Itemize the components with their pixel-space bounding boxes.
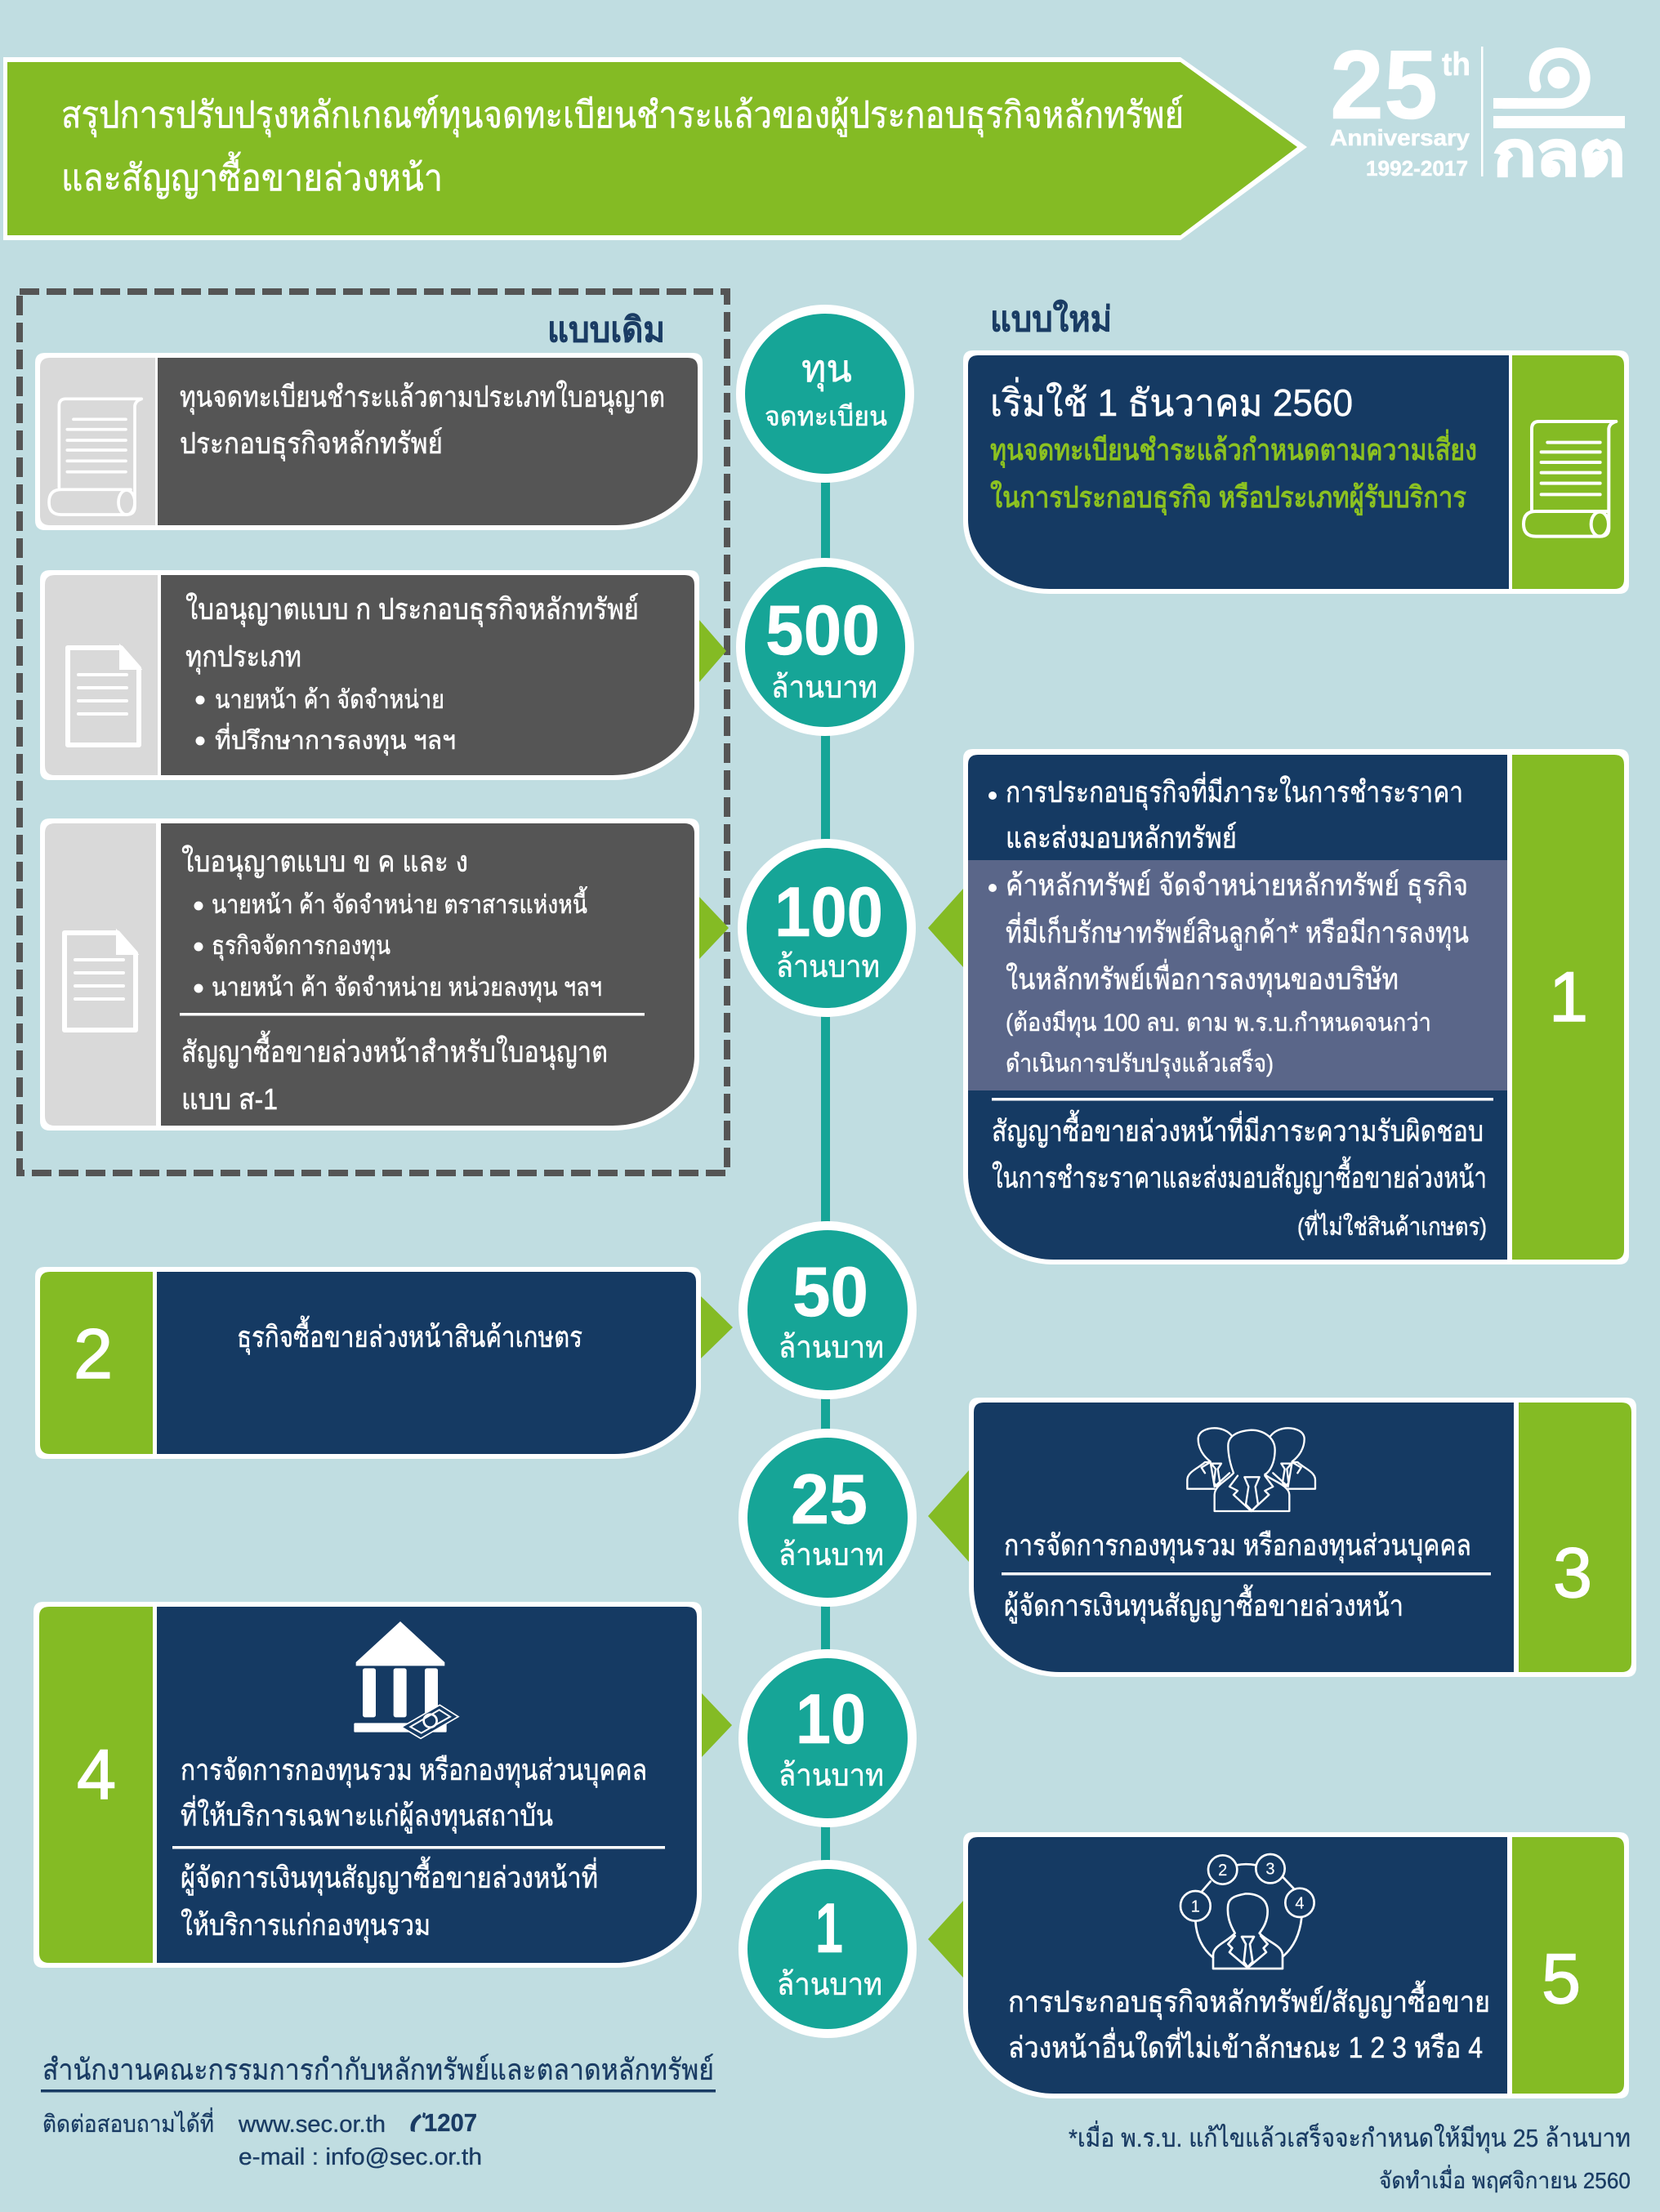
circle: 50 million baht: ล้านบาท — [779, 1331, 884, 1365]
icon: scroll — [49, 399, 141, 515]
arrow: panel 2 to 50 — [701, 1296, 733, 1358]
footnote: จัดทำเมื่อ พฤศจิกายน 2560 — [1379, 2165, 1631, 2193]
licence B C D text: แบบ ส-1 — [181, 1082, 278, 1116]
panel text: ประกอบธุรกิจหลักทรัพย์ — [180, 426, 443, 462]
heading: old scheme: แบบเดิม — [547, 310, 665, 349]
panel 5 text — [1008, 1980, 1490, 2064]
logo: 25th anniversary and SEC: 1992-2017 — [1366, 156, 1468, 181]
panel 1 text — [988, 772, 1493, 1241]
circle: 10 million baht: 10 — [796, 1680, 866, 1759]
number 3: 3 — [1553, 1534, 1592, 1612]
icon: person with numbered circles: 4 — [1295, 1894, 1305, 1912]
panel 5 text: ล่วงหน้าอื่นใดที่ไม่เข้าลักษณะ 1 2 3 หรือ 4 — [1008, 2027, 1483, 2064]
circle: 1 million baht: 1 — [815, 1889, 843, 1968]
panel 3 — [969, 1398, 1636, 1677]
circle: 100 million baht: 100 — [774, 873, 883, 952]
title banner arrow — [3, 57, 1307, 240]
arrow: panel 4 to 10 — [702, 1693, 732, 1757]
timeline vertical line — [821, 408, 830, 1920]
circle: 500 million baht — [736, 558, 914, 736]
panel 1 text: การประกอบธุรกิจที่มีภาระในการชำระราคา — [1006, 772, 1463, 810]
panel 2 text: ธุรกิจซื้อขายล่วงหน้าสินค้าเกษตร — [237, 1315, 582, 1355]
arrow: 100 to panel 1 — [928, 889, 963, 967]
icon: person with numbered circles: 1 — [1191, 1898, 1200, 1915]
panel text — [180, 380, 665, 462]
panel 3 text — [1002, 1528, 1491, 1624]
licence B C D text: ธุรกิจจัดการกองทุน — [212, 931, 390, 961]
circle: 100 million baht — [738, 839, 916, 1017]
panel 1 — [963, 749, 1629, 1264]
panel: licence types B C D — [40, 818, 699, 1131]
arrow: licence B C D to 100 — [699, 897, 729, 959]
panel: new registered capital — [963, 350, 1629, 594]
licence B C D text — [180, 845, 645, 1116]
icon: bank with banknote — [354, 1621, 458, 1738]
footnote — [1069, 2121, 1631, 2193]
new scheme text — [990, 377, 1477, 516]
footer: organisation and contact: ติดต่อสอบถามได้ที่ — [42, 2107, 214, 2138]
panel 1 text: ค้าหลักทรัพย์ จัดจำหน่ายหลักทรัพย์ ธุรกิจ — [1006, 868, 1468, 903]
panel 3 text: ผู้จัดการเงินทุนสัญญาซื้อขายล่วงหน้า — [1004, 1584, 1403, 1624]
icon: person with numbered circles: 2 — [1218, 1862, 1227, 1880]
circle: registered capital: จดทะเบียน — [765, 401, 887, 431]
number 4: 4 — [77, 1736, 116, 1814]
panel 4 text: การจัดการกองทุนรวม หรือกองทุนส่วนบุคคล — [181, 1753, 647, 1788]
icon: person with numbered circles — [1180, 1854, 1314, 1969]
dashed frame: old scheme — [20, 292, 727, 1173]
logo: 25th anniversary and SEC: 25 — [1330, 30, 1438, 140]
panel 1 text: (ต้องมีทุน 100 ลบ. ตาม พ.ร.บ.กำหนดจนกว่า — [1006, 1010, 1431, 1038]
licence B C D text: สัญญาซื้อขายล่วงหน้าสำหรับใบอนุญาต — [181, 1030, 608, 1070]
new scheme text: เริ่มใช้ 1 ธันวาคม 2560 — [990, 377, 1353, 424]
licence B C D text: นายหน้า ค้า จัดจำหน่าย ตราสารแห่งหนี้ — [212, 886, 587, 919]
logo: 25th anniversary and SEC: th — [1442, 47, 1470, 83]
circle: 1 million baht: ล้านบาท — [777, 1968, 882, 2002]
circle: 25 million baht — [739, 1429, 917, 1607]
panel 1 text: (ที่ไม่ใช่สินค้าเกษตร) — [1297, 1210, 1487, 1241]
new scheme text: ทุนจดทะเบียนชำระแล้วกำหนดตามความเสี่ยง — [990, 429, 1477, 469]
circle: 50 million baht: 50 — [792, 1253, 868, 1331]
number 1: 1 — [1549, 958, 1588, 1037]
icon: scroll — [1524, 421, 1616, 537]
licence A text: นายหน้า ค้า จัดจำหน่าย — [215, 685, 444, 714]
circle: registered capital: ทุน — [801, 347, 852, 392]
circle: 25 million baht: ล้านบาท — [779, 1538, 884, 1572]
licence A text — [185, 592, 639, 756]
title text: และสัญญาซื้อขายล่วงหน้า — [61, 151, 443, 198]
panel 4 text — [172, 1753, 665, 1943]
circle: 10 million baht — [739, 1649, 917, 1827]
icon: three people — [1187, 1428, 1315, 1511]
footer: organisation and contact: www.sec.or.th — [238, 2112, 386, 2138]
logo: 25th anniversary and SEC: Anniversary — [1330, 125, 1470, 150]
panel 1 text: สัญญาซื้อขายล่วงหน้าที่มีภาระความรับผิดชอบ — [992, 1109, 1484, 1148]
licence B C D text: ใบอนุญาตแบบ ข ค และ ง — [181, 845, 468, 880]
circle: 1 million baht — [739, 1860, 917, 2038]
icon: document — [68, 648, 139, 745]
footer: organisation and contact: 1207 — [424, 2108, 477, 2137]
panel 5 text: การประกอบธุรกิจหลักทรัพย์/สัญญาซื้อขาย — [1008, 1980, 1490, 2020]
panel 4 text: ให้บริการแก่กองทุนรวม — [181, 1908, 431, 1943]
panel: old registered capital — [35, 353, 703, 530]
title text — [61, 94, 1184, 198]
licence A text: ใบอนุญาตแบบ ก ประกอบธุรกิจหลักทรัพย์ — [185, 592, 639, 627]
circle: 100 million baht: ล้านบาท — [776, 950, 880, 984]
icon: document — [65, 933, 136, 1030]
panel 1 text: ที่มีเก็บรักษาทรัพย์สินลูกค้า* หรือมีการลงทุน — [1006, 912, 1469, 951]
panel 5 — [963, 1832, 1629, 2098]
circle: 10 million baht: ล้านบาท — [779, 1759, 884, 1793]
panel 1 text: ในหลักทรัพย์เพื่อการลงทุนของบริษัท — [1006, 959, 1399, 997]
footer: organisation and contact: e-mail : info@sec.or.th — [239, 2144, 482, 2170]
number 5: 5 — [1542, 1940, 1581, 2018]
licence A text: ทุกประเภท — [185, 640, 301, 675]
circle: registered capital — [736, 305, 914, 483]
logo: 25th anniversary and SEC — [1330, 30, 1625, 188]
panel 4 — [33, 1602, 702, 1968]
circle: 500 million baht: 500 — [765, 591, 880, 670]
arrow: licence A to 500 — [699, 620, 726, 682]
circle: 500 million baht: ล้านบาท — [771, 671, 877, 705]
heading: new scheme: แบบใหม่ — [990, 299, 1112, 338]
panel 1 text: และส่งมอบหลักทรัพย์ — [1006, 821, 1237, 854]
panel 2 — [35, 1267, 701, 1459]
panel text: ทุนจดทะเบียนชำระแล้วตามประเภทใบอนุญาต — [180, 380, 665, 415]
licence B C D text: นายหน้า ค้า จัดจำหน่าย หน่วยลงทุน ฯลฯ — [212, 973, 602, 1003]
panel 1 text: ในการชำระราคาและส่งมอบสัญญาซื้อขายล่วงหน้า — [992, 1156, 1487, 1194]
circle: 50 million baht — [739, 1221, 917, 1399]
panel: licence type A — [40, 570, 699, 780]
footer: organisation and contact — [41, 2053, 716, 2170]
footer: organisation and contact: สำนักงานคณะกรรมการกำกับหลักทรัพย์และตลาดหลักทรัพย์ — [42, 2053, 714, 2086]
new scheme text: ในการประกอบธุรกิจ หรือประเภทผู้รับบริการ — [990, 479, 1467, 516]
icon: person with numbered circles: 3 — [1265, 1861, 1275, 1879]
panel 4 text: ผู้จัดการเงินทุนสัญญาซื้อขายล่วงหน้าที่ — [181, 1856, 598, 1896]
title text: สรุปการปรับปรุงหลักเกณฑ์ทุนจดทะเบียนชำระแล้วของผู้ประกอบธุรกิจหลักทรัพย์ — [61, 94, 1184, 137]
licence A text: ที่ปรึกษาการลงทุน ฯลฯ — [215, 723, 456, 756]
panel 1 text: ดำเนินการปรับปรุงแล้วเสร็จ) — [1006, 1048, 1274, 1079]
circle: 25 million baht: 25 — [791, 1461, 868, 1539]
number 2: 2 — [74, 1315, 113, 1394]
arrow: 1 to panel 5 — [928, 1901, 963, 1978]
panel 4 text: ที่ให้บริการเฉพาะแก่ผู้ลงทุนสถาบัน — [181, 1795, 553, 1834]
panel 3 text: การจัดการกองทุนรวม หรือกองทุนส่วนบุคคล — [1004, 1528, 1471, 1563]
logo: 25th anniversary and SEC: กลต — [1493, 120, 1625, 188]
arrow: 25 to panel 3 — [928, 1470, 969, 1562]
